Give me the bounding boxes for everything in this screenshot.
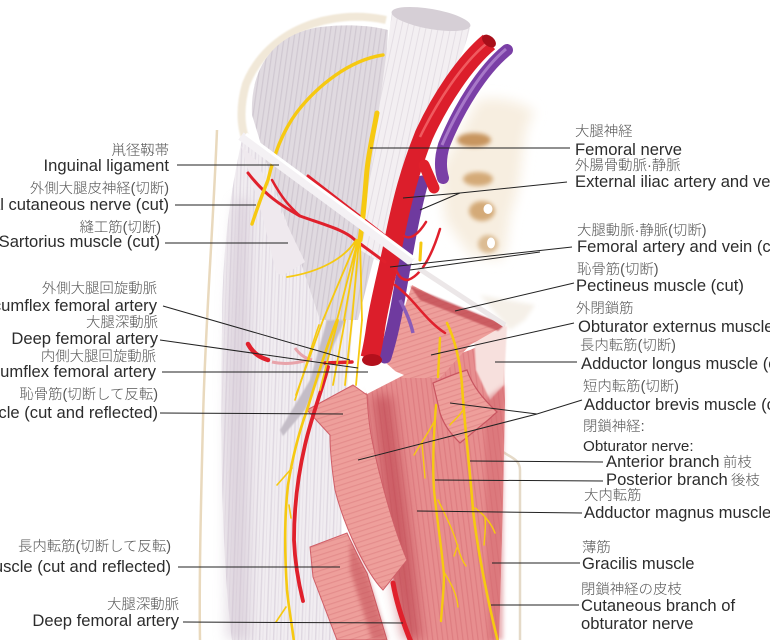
label: medial circumflex femoral artery	[0, 348, 368, 381]
label: posterior branch: Posterior branch	[606, 470, 728, 489]
thigh body	[221, 135, 355, 640]
anterior branch twigs	[414, 420, 466, 607]
label: posterior branch: 後枝	[731, 472, 760, 489]
adductor longus pale tendon	[474, 326, 507, 400]
hidden nerve behind ligament	[420, 243, 421, 260]
panel: nerves	[252, 55, 498, 640]
label: deep femoral artery upper	[11, 314, 358, 368]
label: obturator externus muscle	[431, 300, 770, 355]
label: lateral circumflex femoral artery: 外側大腿回旋動脈	[42, 280, 157, 297]
pectineus shadow	[410, 286, 505, 331]
panel: sartorius stump	[241, 146, 305, 276]
ligament distal	[418, 268, 505, 325]
iliac crest rim	[242, 17, 386, 140]
label: adductor longus reflected: 長内転筋(切断して反転)	[18, 538, 171, 555]
label: inguinal ligament	[44, 142, 279, 175]
label: femoral nerve: 大腿神経	[575, 123, 633, 140]
panel: hip and pelvic bone	[200, 17, 535, 640]
label: external iliac artery and vein	[403, 157, 770, 210]
ligament band	[241, 136, 412, 262]
label: adductor magnus muscle: 大内転筋	[584, 487, 642, 504]
label: medial circumflex femoral artery: 内側大腿回旋動脈	[41, 348, 156, 365]
label: cutaneous branch of obturator nerve: Cutaneous branch of	[581, 596, 735, 615]
label: sartorius muscle	[0, 219, 288, 251]
main adductor body	[362, 335, 505, 640]
psoas cut top	[390, 2, 472, 36]
main artery	[370, 42, 489, 358]
panel: adductor muscle mass	[307, 285, 507, 640]
small epigastric branches	[404, 222, 426, 237]
femoral vein	[385, 182, 422, 357]
adductor longus reflected	[310, 533, 387, 640]
label: adductor longus muscle: 長内転筋(切断)	[580, 337, 676, 354]
label: obturator externus muscle: Obturator externus muscle	[578, 317, 770, 336]
cut circumflex vessels	[248, 344, 268, 360]
label: inguinal ligament: Inguinal ligament	[44, 156, 169, 175]
right skin outline	[503, 452, 520, 640]
label: pectineus reflected	[0, 386, 343, 422]
label: femoral artery and vein	[390, 222, 770, 270]
panel: veins	[385, 49, 507, 357]
label: gracilis muscle: 薄筋	[582, 539, 611, 556]
psoas body	[360, 12, 470, 265]
sacrum shading	[440, 99, 535, 260]
label: gracilis muscle	[492, 539, 694, 573]
posterior branch twigs	[450, 410, 495, 545]
lateral femoral cutaneous nerve	[252, 55, 383, 224]
label: pectineus muscle: 恥骨筋(切断)	[577, 261, 659, 278]
label: deep femoral artery upper: 大腿深動脈	[86, 314, 158, 331]
label: pectineus muscle	[455, 261, 744, 311]
superficial circumflex iliac artery	[308, 176, 388, 236]
label: cutaneous branch of obturator nerve: 閉鎖神経の皮枝	[581, 581, 682, 598]
label: anterior branch	[470, 452, 752, 471]
label: femoral nerve	[370, 123, 682, 159]
pectineus reflected	[307, 385, 407, 590]
label: lateral circumflex femoral artery	[0, 280, 350, 360]
obturator gray tendon	[280, 320, 345, 436]
saphenous nerve	[285, 320, 337, 640]
adductor brevis cut	[433, 370, 497, 443]
fan lower	[296, 320, 362, 395]
artery cut end	[362, 354, 382, 366]
label: pectineus muscle: Pectineus muscle (cut)	[576, 276, 744, 295]
deep femoral artery lower	[393, 583, 411, 640]
label: obturator nerve	[583, 418, 694, 455]
saphenous branches	[276, 325, 319, 622]
external iliac vein	[441, 50, 507, 178]
panel: thigh muscles	[221, 135, 355, 640]
artery lumen top	[480, 32, 498, 50]
label: pectineus reflected: 恥骨筋(切断して反転)	[19, 386, 158, 403]
label: inguinal ligament: 鼡径靱帯	[111, 142, 169, 159]
label: adductor longus reflected	[0, 538, 340, 576]
obturator posterior branch	[447, 323, 498, 640]
deep circumflex iliac artery	[248, 173, 385, 262]
label: anterior branch: 前枝	[723, 454, 752, 471]
sacral foramina	[457, 133, 491, 147]
gap: obturator foramen	[364, 364, 404, 394]
panel: arteries	[248, 32, 498, 640]
label: deep femoral artery upper: Deep femoral artery	[11, 329, 159, 348]
label: cutaneous branch of obturator nerve	[491, 581, 735, 633]
obturator artery twig	[395, 285, 445, 333]
gracilis edge shading	[484, 385, 504, 640]
label: adductor brevis muscle	[358, 378, 770, 460]
panel: psoas muscle	[360, 2, 472, 265]
label: cutaneous branch of obturator nerve: obturator nerve	[581, 614, 694, 633]
label: gracilis muscle: Gracilis muscle	[582, 554, 694, 573]
label: adductor longus muscle	[495, 337, 770, 373]
label: obturator nerve: 閉鎖神経:	[583, 418, 645, 435]
pubic bone	[480, 295, 535, 330]
label: deep femoral artery lower: Deep femoral artery	[32, 611, 180, 630]
label: lateral femoral cutaneous nerve	[0, 180, 256, 214]
reflected muscle shadow	[350, 540, 388, 640]
medial small vein	[400, 300, 413, 333]
label: posterior branch	[435, 470, 760, 489]
pectineus cut upper	[385, 285, 505, 378]
label: deep femoral artery lower: 大腿深動脈	[107, 596, 179, 613]
femoral nerve trunk	[360, 113, 377, 240]
deep femoral artery descending	[294, 367, 328, 601]
thigh lateral shading	[225, 200, 250, 640]
label: adductor magnus muscle: Adductor magnus muscle	[584, 503, 770, 522]
label: sartorius muscle: 縫工筋(切断)	[79, 219, 161, 236]
label: femoral nerve: Femoral nerve	[575, 140, 682, 159]
label: obturator externus muscle: 外閉鎖筋	[576, 300, 634, 317]
internal iliac stump	[424, 165, 434, 188]
panel: inguinal ligament	[241, 134, 505, 325]
label: anterior branch: Anterior branch	[606, 452, 719, 471]
obturator anterior branch	[433, 338, 444, 621]
femoral nerve fan	[287, 240, 362, 320]
adductor valley shadow	[372, 395, 422, 640]
label: adductor brevis muscle: 短内転筋(切断)	[583, 378, 679, 395]
skin outline	[200, 130, 217, 640]
label: adductor magnus muscle	[417, 487, 770, 522]
label: external iliac artery and vein: 外腸骨動脈·静脈	[575, 157, 681, 174]
label: femoral artery and vein: 大腿動脈·静脈(切断)	[577, 222, 707, 239]
panel: iliacus muscle	[252, 25, 388, 320]
label: obturator nerve: Obturator nerve:	[583, 438, 694, 455]
label: deep femoral artery lower	[32, 596, 403, 630]
label: sartorius muscle: Sartorius muscle (cut)	[0, 232, 160, 251]
label: lateral femoral cutaneous nerve: 外側大腿皮神経(切断)	[30, 180, 169, 197]
artery highlight	[420, 44, 486, 137]
